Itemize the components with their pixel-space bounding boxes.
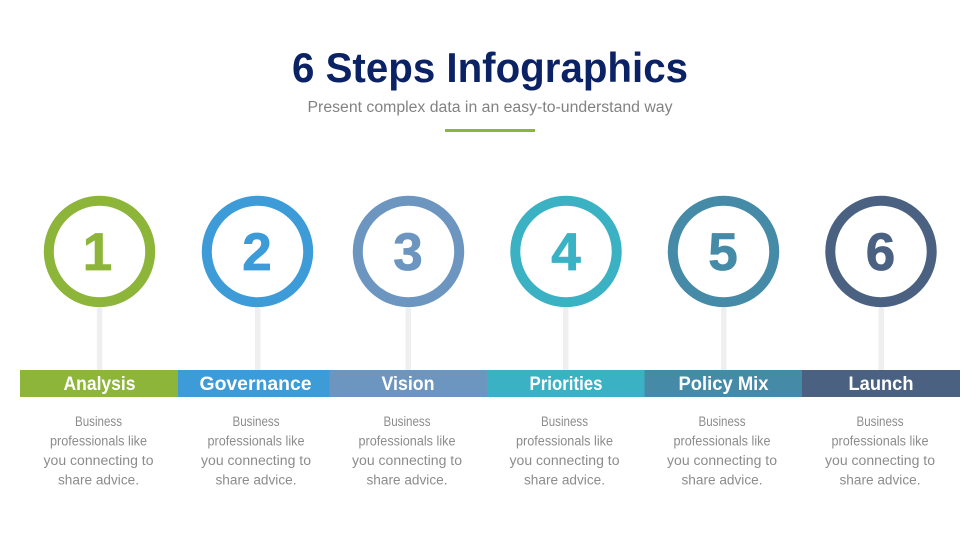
label bar: Vision: Vision bbox=[382, 374, 434, 395]
description 1: Business bbox=[75, 414, 122, 429]
ring with number 1 bbox=[49, 201, 150, 302]
description 5: you connecting to bbox=[667, 453, 777, 468]
connector 1 bbox=[97, 308, 102, 370]
ring with number 4: 4 bbox=[551, 223, 581, 282]
step 1: Analysis bbox=[20, 201, 178, 488]
ring with number 4 bbox=[515, 201, 617, 302]
title underline accent bbox=[445, 129, 535, 132]
description 5: share advice. bbox=[682, 472, 762, 488]
step 5: Policy Mix bbox=[644, 201, 802, 488]
label bar: Analysis bbox=[20, 370, 178, 397]
description 2: professionals like bbox=[208, 434, 304, 448]
ring with number 1: 1 bbox=[83, 223, 112, 282]
label bar: Analysis: Analysis bbox=[64, 374, 136, 395]
connector 4 bbox=[563, 308, 568, 370]
description 4: share advice. bbox=[524, 472, 605, 488]
label bar: Launch: Launch bbox=[848, 374, 914, 395]
label bar: Policy Mix bbox=[644, 370, 802, 397]
description 1: you connecting to bbox=[44, 453, 154, 468]
title: 6 Steps Infographics bbox=[292, 44, 688, 91]
step 3: Vision bbox=[330, 201, 487, 488]
label bar: Governance: Governance bbox=[200, 374, 312, 395]
description 2: Business bbox=[232, 414, 280, 429]
ring with number 6: 6 bbox=[866, 223, 895, 282]
connector 3 bbox=[406, 308, 411, 370]
description 6: share advice. bbox=[840, 472, 920, 488]
description 3: you connecting to bbox=[352, 453, 462, 468]
description 6: Business bbox=[856, 414, 904, 429]
ring with number 5: 5 bbox=[708, 223, 738, 282]
description 4: professionals like bbox=[516, 434, 613, 448]
ring with number 3: 3 bbox=[393, 223, 423, 282]
label bar: Priorities: Priorities bbox=[530, 374, 602, 395]
label bar: Priorities bbox=[487, 370, 644, 397]
description 5: professionals like bbox=[674, 434, 770, 448]
label bar: Policy Mix: Policy Mix bbox=[678, 374, 769, 395]
ring with number 3 bbox=[358, 201, 459, 302]
connector 6 bbox=[878, 308, 884, 370]
ring with number 5 bbox=[673, 201, 774, 302]
description 4: Business bbox=[541, 414, 588, 429]
ring with number 2: 2 bbox=[242, 223, 272, 282]
description 6: professionals like bbox=[832, 434, 928, 448]
description 3: professionals like bbox=[358, 434, 456, 448]
description 3: share advice. bbox=[366, 472, 448, 488]
subtitle: Present complex data in an easy-to-understand way bbox=[308, 99, 673, 116]
ring with number 2 bbox=[207, 201, 308, 302]
connector 2 bbox=[255, 308, 260, 370]
description 2: you connecting to bbox=[201, 453, 311, 468]
description 4: you connecting to bbox=[510, 453, 620, 468]
ring with number 6 bbox=[830, 201, 932, 302]
description 3: Business bbox=[384, 414, 431, 429]
label bar: Governance bbox=[178, 370, 330, 397]
description 6: you connecting to bbox=[825, 453, 935, 468]
step 4: Priorities bbox=[487, 201, 644, 488]
description 2: share advice. bbox=[216, 472, 296, 488]
label bar: Vision bbox=[330, 370, 487, 397]
connector 5 bbox=[721, 308, 726, 370]
label bar: Launch bbox=[802, 370, 960, 397]
description 1: professionals like bbox=[50, 434, 147, 448]
step 2: Governance bbox=[178, 201, 330, 488]
description 1: share advice. bbox=[58, 472, 139, 488]
description 5: Business bbox=[698, 414, 746, 429]
step 6: Launch bbox=[802, 201, 960, 488]
